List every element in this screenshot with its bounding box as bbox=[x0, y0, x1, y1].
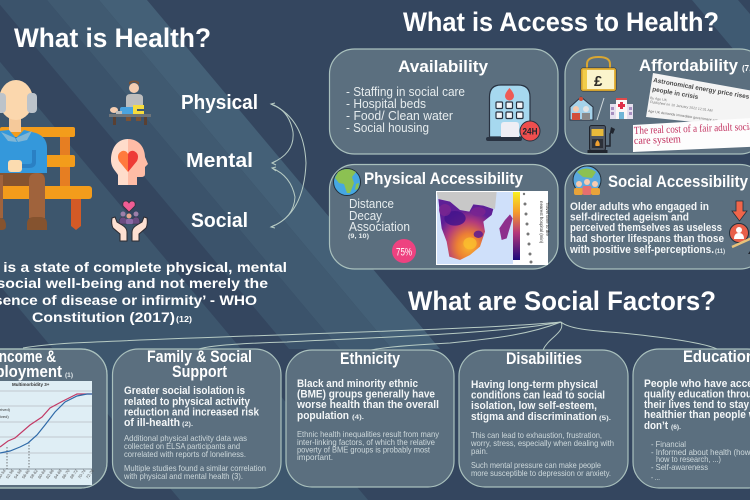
icon: globe bbox=[334, 168, 360, 196]
panel: availability: - Food/ Clean water bbox=[346, 109, 453, 123]
panel: family and social support: collected on ELSA participants and bbox=[124, 442, 240, 451]
panel: disabilities: Such mental pressure can make people bbox=[471, 461, 601, 470]
icon: head with heart bbox=[111, 139, 148, 185]
labels: physical, mental, social: Mental bbox=[186, 150, 253, 172]
icon: globe with people bbox=[573, 166, 601, 195]
panel: disabilities: worry, stress, especially when dealing with bbox=[470, 439, 614, 448]
line chart: multimorbidity by age: 70-74 bbox=[77, 468, 87, 480]
quote: WHO definition of health: Constitution (2017) bbox=[32, 309, 175, 325]
panel: social accessibility: perceived themselves as useless bbox=[570, 222, 722, 234]
connector lines from heading to the five factors bbox=[23, 322, 717, 350]
panel: disabilities: stigma and discrimination bbox=[471, 411, 597, 423]
panel: income and employment bbox=[0, 347, 107, 488]
newspaper clippings: care system bbox=[634, 133, 682, 147]
map: travel time to nearest hospital: nearest hospital (min) bbox=[539, 201, 544, 244]
panel: disabilities: pain. bbox=[471, 447, 488, 456]
panel: family and social support: Additional physical activity data was bbox=[124, 434, 247, 443]
panel: ethnicity: (4). bbox=[352, 414, 364, 421]
labels: physical, mental, social: Physical bbox=[181, 92, 258, 114]
panel: availability: - Social housing bbox=[346, 121, 429, 135]
line chart: multimorbidity by age: 66-70 bbox=[61, 468, 71, 480]
title: What is Access to Health?: What is Access to Health? bbox=[403, 7, 719, 37]
newspaper clippings: people in crisis bbox=[652, 86, 699, 101]
newspaper clippings: Age UK demands immediate government action bbox=[648, 109, 722, 123]
panel: family and social support: related to physical activity bbox=[124, 396, 250, 408]
line chart: multimorbidity by age: 62-66 bbox=[45, 468, 55, 480]
panel: ethnicity: poverty of BME groups is probably most bbox=[297, 446, 431, 454]
newspaper clippings: Published on 10 January 2022 12:01 AM bbox=[650, 100, 713, 113]
panel: family and social support: Multiple studies found a similar correlation bbox=[124, 464, 266, 473]
badge: 75%: 75% bbox=[396, 246, 412, 258]
icon: padlock with pound sign bbox=[581, 57, 616, 91]
panel: family and social support: with physical and mental health (3). bbox=[123, 472, 243, 481]
panel: disabilities: isolation, low self-esteem, bbox=[471, 400, 597, 412]
line chart: multimorbidity by age: 58-62 bbox=[29, 468, 39, 480]
icon: down arrow and person on slope bbox=[730, 201, 750, 254]
panel: disabilities bbox=[459, 349, 628, 487]
panel: family and social support: Greater social isolation is bbox=[124, 385, 245, 397]
badge: 75% bbox=[392, 239, 416, 263]
panel: availability: Availability bbox=[398, 57, 489, 76]
quote: WHO definition of health: (12) bbox=[176, 315, 192, 324]
newspaper clippings: By Age UK bbox=[650, 96, 668, 102]
map: travel time to nearest hospital bbox=[436, 191, 550, 265]
panel: family and social support: (2). bbox=[182, 421, 193, 428]
panel: family and social support: reduction and increased risk bbox=[124, 406, 260, 418]
panel: ethnicity: (BME) groups generally have bbox=[297, 388, 435, 400]
panel: physical accessibility: Distance bbox=[349, 197, 394, 211]
icon: hospital 24H: 24H bbox=[522, 126, 538, 138]
panel: education: (6). bbox=[671, 424, 681, 431]
panel: ethnicity: population bbox=[297, 410, 349, 422]
labels: physical, mental, social bbox=[181, 92, 258, 232]
panel: ethnicity bbox=[286, 349, 454, 487]
map: travel time to nearest hospital: Travel time to the bbox=[545, 202, 550, 236]
panel: education: how to research, ...) bbox=[656, 455, 721, 464]
panel: availability: - Hospital beds bbox=[346, 97, 426, 111]
panel: social accessibility: Older adults who engaged in bbox=[570, 201, 709, 213]
panel: physical accessibility: Decay bbox=[349, 209, 383, 223]
panel: disabilities: conditions can lead to social bbox=[471, 390, 605, 402]
line chart: multimorbidity by age: rived) bbox=[0, 407, 11, 412]
line chart: multimorbidity by age: 60-64 bbox=[37, 468, 47, 480]
icon: padlock with pound sign: £ bbox=[594, 73, 603, 90]
line chart: multimorbidity by age: 54-58 bbox=[13, 468, 23, 480]
icon: hands holding people bbox=[112, 201, 147, 241]
panel: disabilities: Disabilities bbox=[506, 349, 582, 368]
title: What is Health?: What is Health? bbox=[14, 23, 211, 53]
icon: fuel pump bbox=[588, 126, 615, 153]
panel: income and employment: (1) bbox=[65, 372, 73, 379]
newspaper clippings bbox=[633, 73, 750, 152]
line chart: multimorbidity by age: 64-68 bbox=[53, 468, 63, 480]
line chart: multimorbidity by age bbox=[0, 381, 95, 485]
panel: physical accessibility: Physical Accessibility bbox=[364, 169, 523, 188]
line chart: multimorbidity by age: ived) bbox=[0, 414, 9, 419]
icon: hospital 24H bbox=[486, 85, 540, 141]
panel: disabilities: This can lead to exhaustion, frustration, bbox=[471, 431, 602, 440]
line chart: multimorbidity by age: 68-72 bbox=[69, 468, 79, 480]
panel: family and social support bbox=[112, 347, 281, 488]
panel: ethnicity: important. bbox=[297, 453, 333, 462]
panel: physical accessibility bbox=[330, 164, 558, 269]
line chart: multimorbidity by age: 56-60 bbox=[21, 468, 31, 480]
panel: education: - ... bbox=[651, 473, 660, 482]
panel: social accessibility: with positive self-perceptions. bbox=[569, 244, 714, 256]
panel: education: - Self-awareness bbox=[651, 463, 708, 472]
panel: education bbox=[633, 347, 750, 488]
panel: ethnicity: inter-linking factors, of which the relative bbox=[297, 438, 435, 447]
icon: small hospital bbox=[610, 98, 633, 119]
panel: social accessibility: (11) bbox=[715, 248, 725, 255]
quote: WHO definition of health bbox=[0, 259, 287, 325]
title: What are Social Factors?: What are Social Factors? bbox=[408, 286, 716, 316]
panel: ethnicity: Ethnicity bbox=[340, 349, 400, 368]
panel: availability: - Staffing in social care bbox=[346, 85, 465, 99]
panel: family and social support: Support bbox=[172, 362, 227, 381]
divider slash bbox=[597, 98, 604, 120]
panel: ethnicity: Ethnic health inequalities result from many bbox=[297, 430, 440, 439]
panel: family and social support: Family & Social bbox=[147, 347, 252, 366]
panel: social accessibility bbox=[565, 164, 750, 269]
panel: affordability bbox=[565, 49, 750, 154]
panel: physical accessibility: (9, 10) bbox=[348, 233, 369, 240]
panel: disabilities: Having long-term physical bbox=[471, 379, 598, 391]
icon: physiotherapy bbox=[109, 80, 151, 125]
panel: affordability: Affordability bbox=[639, 56, 739, 75]
panel: family and social support: correlated with reports of loneliness. bbox=[124, 450, 246, 459]
panel: social accessibility: had shorter lifespans than those bbox=[570, 233, 724, 245]
panel: ethnicity: worse health than the overall bbox=[296, 399, 439, 411]
panel: disabilities: (5). bbox=[599, 415, 611, 422]
panel: education: don’t bbox=[644, 420, 668, 432]
panel: disabilities: more susceptible to depression or anxiety. bbox=[471, 469, 611, 478]
panel: availability bbox=[330, 49, 558, 154]
line chart: multimorbidity by age: 52-56 bbox=[5, 468, 15, 480]
line chart: multimorbidity by age: 72-76 bbox=[85, 468, 95, 480]
panel: ethnicity: Black and minority ethnic bbox=[297, 378, 418, 390]
icon: home with older couple bbox=[570, 97, 593, 120]
line chart: multimorbidity by age: Multimorbidity 3+ bbox=[12, 382, 50, 387]
labels: physical, mental, social: Social bbox=[191, 210, 248, 232]
panel: education: - Financial bbox=[651, 440, 686, 449]
panel: social accessibility: self-directed ageism and bbox=[570, 212, 689, 224]
panel: physical accessibility: Association bbox=[349, 220, 410, 234]
panel: family and social support: of ill-health bbox=[124, 417, 180, 429]
arrows linking physical, mental, social bbox=[271, 103, 306, 228]
icon: older man on bench bbox=[0, 80, 92, 230]
